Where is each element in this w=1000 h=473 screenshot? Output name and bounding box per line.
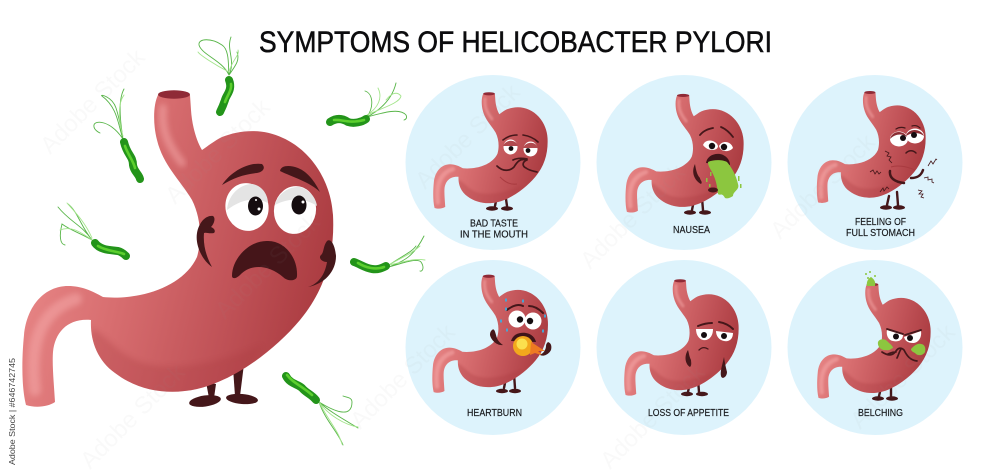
fireball glow [516, 338, 528, 350]
eyes [890, 128, 924, 146]
fireball [513, 336, 533, 356]
character feet [486, 192, 513, 211]
main stomach character [22, 90, 336, 409]
right hand [308, 240, 336, 287]
mouth [511, 333, 536, 342]
mouth [906, 151, 916, 153]
left eye [221, 179, 273, 235]
right eye [270, 183, 320, 237]
character body [432, 275, 548, 393]
panel background [788, 75, 962, 250]
brows [698, 322, 733, 329]
faint watermark: Adobe Stock [845, 318, 961, 434]
faint watermark: Adobe Stock [765, 128, 881, 244]
vomit [708, 160, 738, 198]
character body [817, 283, 931, 398]
mouth [699, 348, 708, 350]
flames [530, 342, 545, 356]
pain zigzags [870, 151, 937, 198]
label: BELCHING [858, 407, 903, 419]
eyes [696, 329, 733, 341]
right gas cloud [911, 344, 925, 355]
open mouth [232, 241, 297, 280]
faint watermark: Adobe Stock [595, 358, 711, 473]
label: FEELING OF [855, 216, 906, 228]
angry brows [887, 329, 921, 335]
character body [625, 94, 744, 213]
stock image credit: Adobe Stock | #646742745 [7, 358, 17, 465]
left gas cloud [878, 339, 893, 350]
label: HEARTBURN [467, 407, 522, 419]
panel background [788, 260, 962, 435]
bacterium: top [198, 37, 238, 112]
hands over mouth [497, 158, 537, 172]
right eyebrow [280, 166, 320, 192]
arm [693, 164, 702, 184]
label [460, 218, 528, 240]
panel: heartburn [406, 260, 580, 435]
faint watermark: Adobe Stock [210, 208, 326, 324]
label: NAUSEA [673, 224, 710, 236]
panel: loss of appetite [596, 260, 772, 435]
belly crease [891, 166, 915, 170]
left hand [197, 216, 215, 267]
brows [503, 135, 538, 142]
faint watermark: Adobe Stock [410, 78, 526, 194]
faint watermark: Adobe Stock [345, 318, 461, 434]
sweat drops [500, 298, 546, 333]
label [846, 216, 915, 239]
panel: bad taste in the mouth [406, 75, 580, 250]
character body [433, 92, 548, 209]
eyes [887, 330, 921, 343]
hands over mouth [882, 348, 917, 361]
gas from esophagus [865, 271, 876, 286]
character body [817, 91, 926, 203]
brows [896, 126, 920, 129]
stomach body [22, 90, 333, 407]
vomit droplets [706, 172, 742, 188]
hands [490, 329, 551, 356]
character body [624, 279, 739, 396]
arms [686, 350, 727, 378]
mouth [706, 154, 730, 165]
eyes [503, 140, 538, 156]
label: LOSS OF APPETITE [648, 407, 729, 419]
chin crease [500, 177, 517, 184]
brows [700, 127, 733, 137]
title: SYMPTOMS OF HELICOBACTER PYLORI [259, 26, 772, 59]
panel background [406, 75, 580, 250]
bacterium: right [354, 236, 425, 271]
label: IN THE MOUTH [460, 228, 528, 240]
faint watermark: Adobe Stock [75, 358, 191, 473]
label: BAD TASTE [470, 218, 518, 230]
bacterium: upper right [330, 83, 407, 123]
character feet [872, 386, 898, 401]
brows [507, 305, 543, 313]
character feet [684, 198, 711, 215]
character feet [880, 192, 905, 210]
character feet [496, 374, 521, 393]
panel background [596, 260, 772, 435]
label: FULL STOMACH [846, 227, 915, 239]
faint watermark: Adobe Stock [575, 158, 691, 274]
character feet [681, 379, 708, 396]
panel: nausea [596, 75, 772, 250]
bacterium: bottom [286, 375, 358, 445]
panel: feeling of full stomach [788, 75, 962, 250]
left eyebrow [222, 164, 264, 185]
faint watermark: Adobe Stock [160, 93, 276, 209]
bacterium: upper left [94, 89, 140, 179]
legs and shoes [188, 364, 258, 409]
hand [708, 188, 718, 192]
panel background [406, 260, 580, 435]
faint watermark: Adobe Stock [35, 43, 151, 159]
panel: belching [788, 260, 962, 435]
eyes [508, 310, 542, 330]
eyes [703, 141, 733, 151]
arms on belly [890, 170, 923, 183]
panel background [596, 75, 772, 250]
bacterium: left [58, 203, 126, 256]
